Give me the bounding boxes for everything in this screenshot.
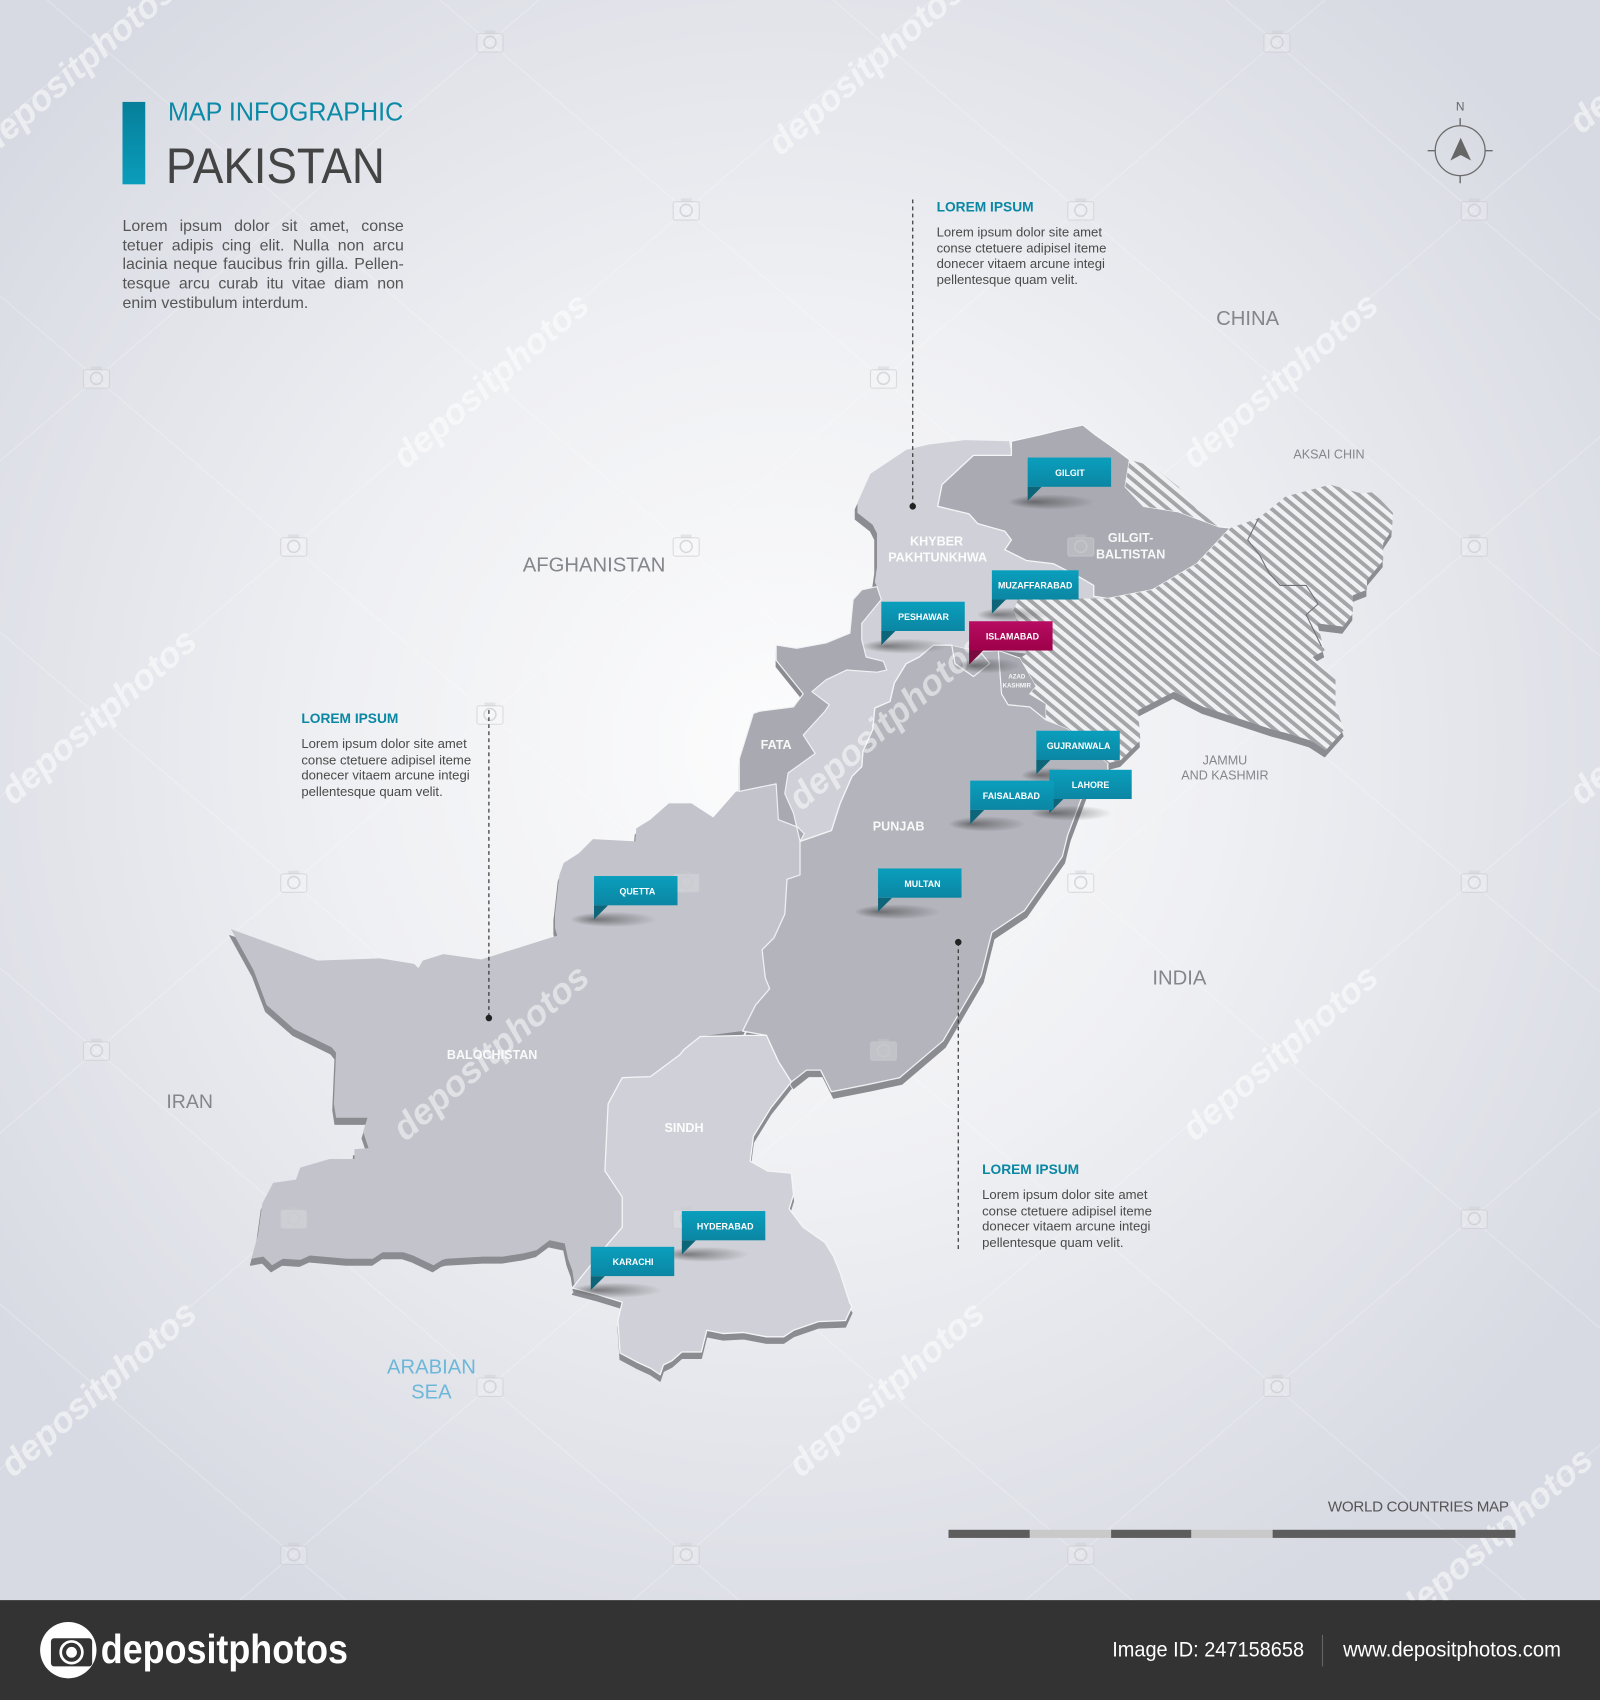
callout: north: donecer vitaem arcune integi [937, 256, 1105, 271]
city pin: Peshawar: PESHAWAR [898, 612, 950, 622]
title block: PAKISTAN [166, 138, 385, 194]
title block [166, 96, 403, 194]
callout: south: Lorem ipsum dolor site amet [982, 1187, 1148, 1202]
region: Gilgit-Baltistan [938, 425, 1230, 598]
province labels: PUNJAB [873, 819, 924, 833]
intro paragraph: Lorem ipsum dolor sit amet, conse [122, 218, 404, 235]
province labels: KASHMIR [1003, 683, 1032, 689]
city pin: Multan [854, 868, 962, 919]
callout: west: Lorem ipsum dolor site amet [301, 736, 467, 751]
city pin: Quetta [570, 876, 678, 927]
scale label: WORLD COUNTRIES MAP [1328, 1498, 1509, 1515]
province: Balochistan [231, 784, 800, 1285]
intro paragraph: enim vestibulum interdum. [122, 295, 308, 312]
divider [1321, 1635, 1323, 1666]
callout: south: pellentesque quam velit. [982, 1235, 1123, 1250]
depositphotos wordmark: depositphotos [101, 1626, 348, 1672]
watermarks: depositphotos [385, 284, 597, 476]
callout: north: LOREM IPSUM [937, 199, 1034, 214]
city pin: Muzaffarabad [977, 570, 1079, 622]
footer band [0, 1600, 1600, 1700]
country labels: INDIA [1152, 967, 1207, 989]
region: Azad Kashmir [998, 651, 1046, 720]
city pin: Hyderabad [662, 1211, 765, 1262]
city pin: Karachi: KARACHI [613, 1257, 654, 1267]
Islamabad loop outline [952, 645, 990, 677]
callout: north: conse ctetuere adipisel iteme [937, 241, 1106, 256]
callout: north [909, 199, 1106, 510]
province: Sindh [572, 1035, 852, 1375]
callout: west: pellentesque quam velit. [301, 784, 443, 799]
province labels: KHYBER [910, 534, 963, 548]
intro paragraph [122, 218, 404, 318]
city pin: Muzaffarabad: MUZAFFARABAD [998, 581, 1073, 591]
Aksai Chin boundary line [1248, 518, 1321, 646]
intro paragraph: tetuer adipis cing elit. Nulla non arcu [122, 237, 404, 254]
city pin: Peshawar [862, 602, 965, 654]
city pin: Gujranwala: GUJRANWALA [1047, 741, 1111, 751]
callout: south: LOREM IPSUM [982, 1162, 1079, 1177]
city pin: Islamabad: ISLAMABAD [986, 632, 1040, 642]
city pin: Lahore: LAHORE [1072, 780, 1109, 790]
watermarks: depositphotos [1388, 1439, 1600, 1631]
country labels [166, 308, 1365, 1113]
sea label [387, 1357, 476, 1404]
watermarks: depositphotos [385, 956, 597, 1148]
city pin: Karachi [571, 1247, 674, 1298]
country labels: AKSAI CHIN [1293, 448, 1365, 462]
province: Khyber Pakhtunkhwa [857, 440, 1108, 683]
sea label: ARABIAN [387, 1357, 476, 1379]
callout: west: conse ctetuere adipisel iteme [301, 752, 471, 767]
map extrusion shadow [230, 432, 1392, 1381]
callout: south: donecer vitaem arcune integi [982, 1219, 1151, 1234]
city pin: Gilgit [1008, 458, 1111, 510]
sea label: SEA [411, 1382, 452, 1404]
callout: south: conse ctetuere adipisel iteme [982, 1203, 1152, 1218]
city pin: Hyderabad: HYDERABAD [697, 1221, 754, 1231]
callout: west: LOREM IPSUM [301, 711, 398, 726]
depositphotos logo icon [40, 1622, 96, 1678]
province labels: PAKHTUNKHWA [888, 551, 987, 565]
callout: north: pellentesque quam velit. [937, 272, 1078, 287]
city pin: Lahore [1030, 770, 1132, 821]
province labels: GILGIT- [1108, 531, 1153, 545]
province labels: SINDH [664, 1121, 704, 1135]
watermarks: depositphotos [1174, 284, 1386, 476]
title block: MAP INFOGRAPHIC [168, 96, 403, 126]
strip border [800, 645, 952, 841]
region: FATA [739, 587, 887, 841]
city pin: Gujranwala [1021, 731, 1120, 783]
watermarks: depositphotos [1174, 956, 1386, 1148]
province: Punjab [743, 645, 1108, 1092]
city pin: Gilgit: GILGIT [1055, 468, 1085, 478]
callout: west [301, 710, 492, 1021]
intro paragraph: lacinia neque faucibus frin gilla. Pellen- [122, 256, 404, 274]
province labels: BALOCHISTAN [447, 1048, 537, 1062]
city pin: Islamabad [956, 621, 1053, 673]
country labels: JAMMU [1203, 753, 1247, 767]
country labels: IRAN [166, 1091, 213, 1113]
country labels: AND KASHMIR [1181, 769, 1269, 783]
camera watermarks [83, 30, 1487, 1564]
intro paragraph: tesque arcu curab itu vitae diam non [122, 275, 404, 293]
province labels: BALTISTAN [1096, 547, 1165, 561]
callout: west: donecer vitaem arcune integi [301, 768, 470, 783]
KP southern strip [785, 659, 906, 841]
disputed area hatch: Jammu and Kashmir [1014, 485, 1393, 763]
city pin: Faisalabad [949, 781, 1054, 832]
disputed area hatch north [1125, 460, 1220, 527]
callout: south [955, 939, 1152, 1250]
country labels: AFGHANISTAN [523, 554, 665, 576]
scale bar [949, 1530, 1515, 1538]
province labels [447, 531, 1165, 1135]
watermarks: depositphotos [780, 1293, 993, 1484]
country labels: CHINA [1216, 308, 1280, 330]
city pin: Quetta: QUETTA [619, 886, 656, 896]
title accent bar [122, 102, 145, 184]
site url: www.depositphotos.com [1342, 1637, 1561, 1662]
watermarks: depositphotos [780, 626, 993, 818]
map of Pakistan [230, 425, 1393, 1381]
city pin: Faisalabad: FAISALABAD [983, 791, 1041, 801]
icon: compass [1428, 100, 1493, 183]
province labels: FATA [761, 738, 792, 752]
province labels: AZAD [1008, 675, 1026, 681]
city pin: Multan: MULTAN [904, 879, 941, 889]
image id: Image ID: 247158658 [1112, 1637, 1304, 1662]
icon: compass: N [1456, 100, 1464, 114]
callout: north: Lorem ipsum dolor site amet [937, 224, 1102, 239]
